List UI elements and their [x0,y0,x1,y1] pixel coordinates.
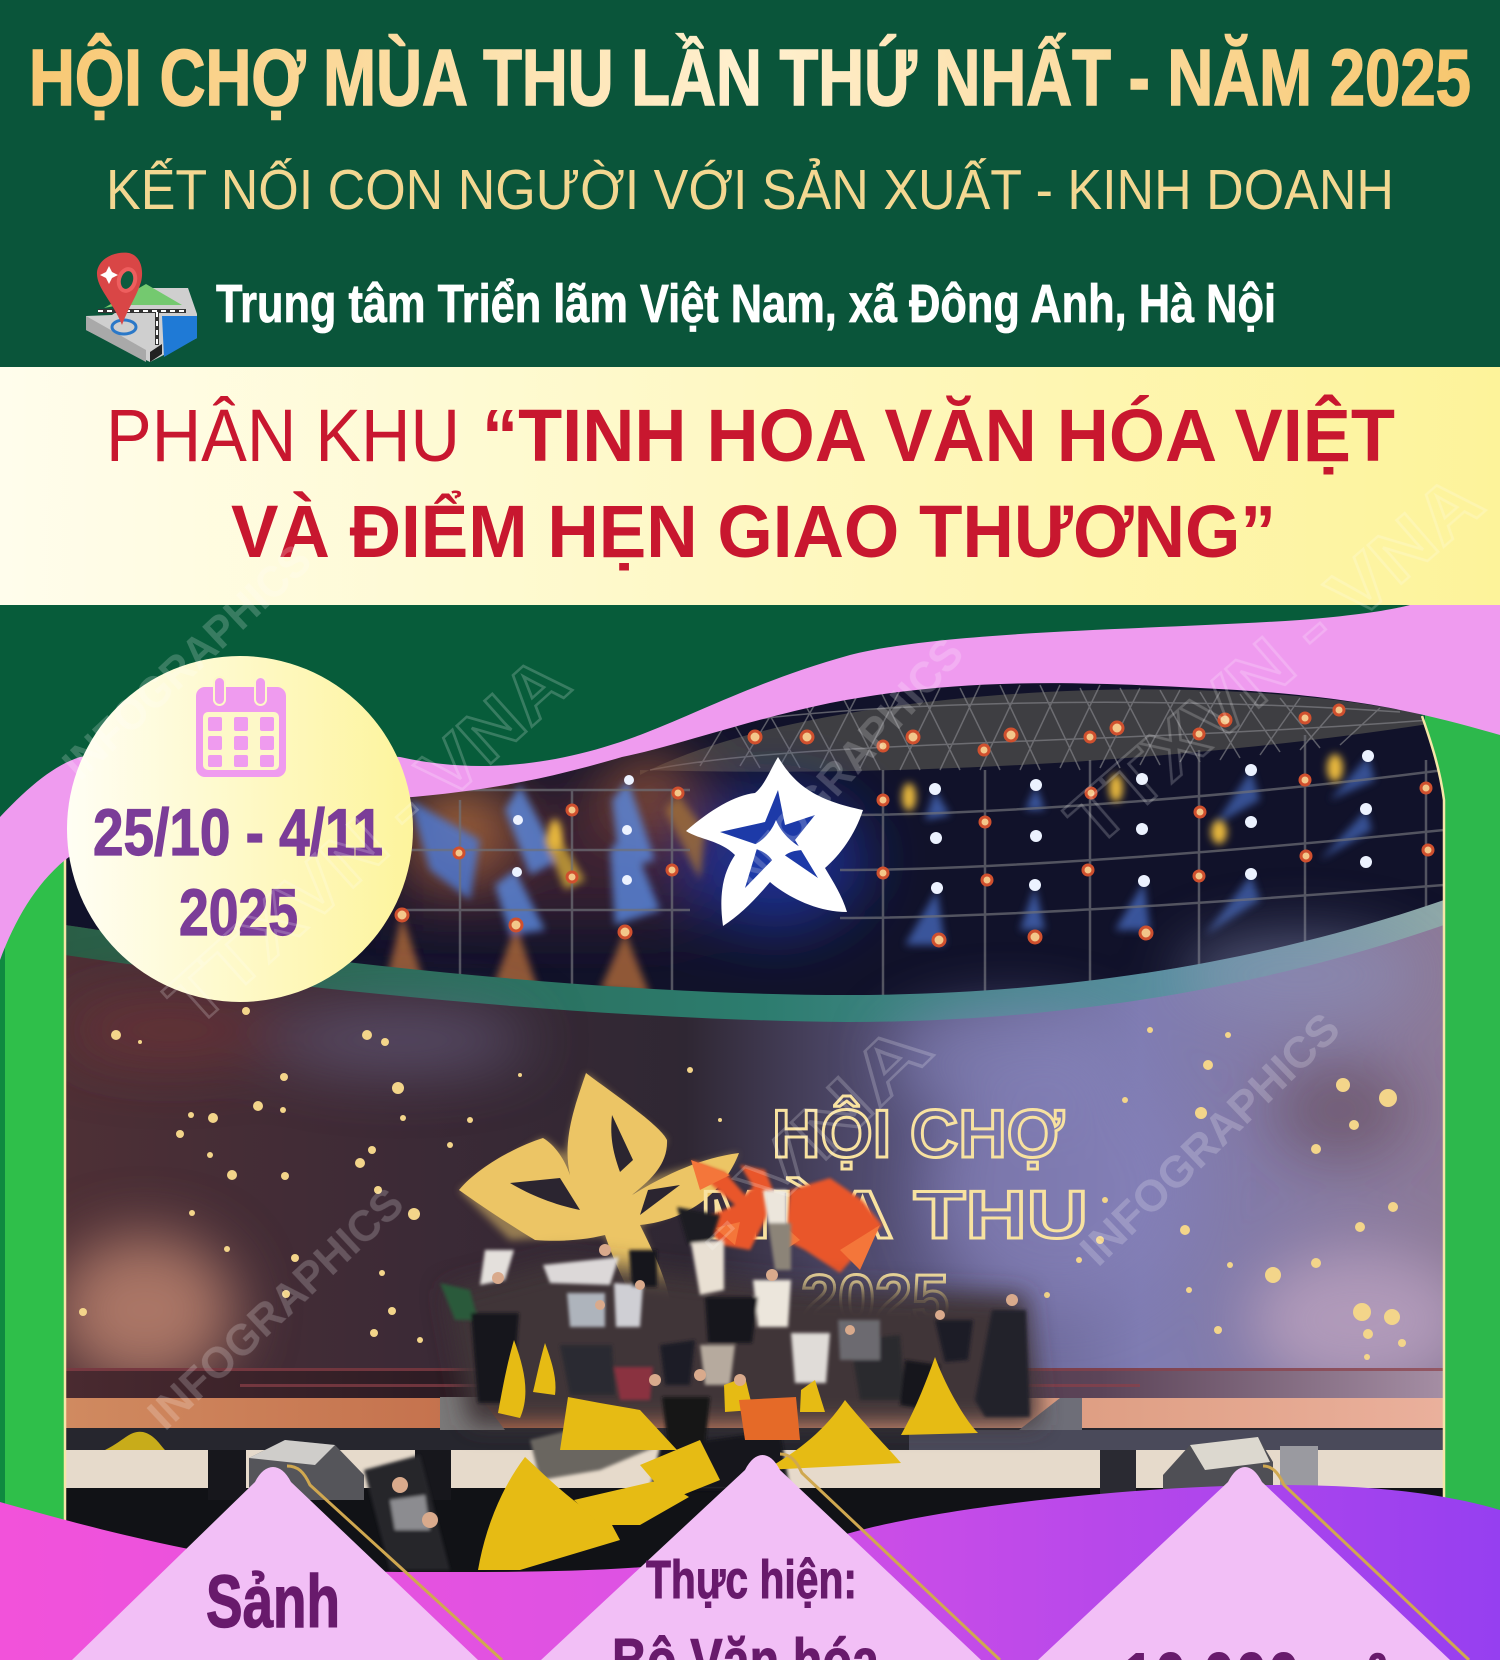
orange tree [691,1160,882,1273]
icon: map pin [86,253,197,362]
gold outline [780,1454,1000,1660]
pink wave [0,605,1500,960]
stage lights [396,705,1433,946]
watermarks: TTXVN - VNA [150,639,585,1042]
header panel [0,0,1500,367]
light beams [385,756,1375,995]
gold outline [287,1466,502,1660]
watermarks: INFOGRAPHICS [53,535,321,789]
photo frame edges [65,716,1444,1530]
truss roof [640,685,1440,775]
heading: zone label: PHÂN KHU [106,394,460,477]
gold outline [1263,1466,1469,1660]
info triangle: venue [72,1466,502,1660]
bottom wave [0,1485,1500,1660]
stage photo [66,683,1443,1572]
smoke haze [55,935,1470,1390]
orange costume [739,1397,800,1440]
date text: 25/10 - 4/11 [93,795,383,869]
logo: gold flower [459,1073,739,1320]
heading: zone name line 1: “TINH HOA VĂN HÓA VIỆT [482,394,1395,477]
neon sign text: 2025 [801,1261,949,1337]
heading: zone name line 2: VÀ ĐIỂM HẸN GIAO THƯƠNG” [231,490,1276,573]
venue text: Sảnh [206,1560,340,1643]
neon sign text: MÙA THU [700,1177,1088,1253]
watermarks: TTXVN - VNA [1051,458,1498,862]
date circle [67,656,413,1002]
watermarks: - VNA [673,1005,947,1274]
stars [79,1007,1406,1360]
info triangle: organiser [541,1454,1000,1660]
logo: white flower [686,757,863,926]
LED screen [66,925,1443,1368]
coloured back glow [390,755,865,930]
stage floor [66,1368,1443,1572]
info triangle: area [1038,1466,1469,1660]
organiser label: Thực hiện: [646,1550,857,1610]
watermarks [53,458,1498,1439]
yellow fabric [478,1340,978,1570]
neon sign text [704,1094,1085,1310]
banner: zone name [0,367,1500,605]
year text: 2025 [179,875,298,949]
watermarks: INFOGRAPHICS [138,1178,413,1439]
watermarks: INFOGRAPHICS [716,629,973,907]
neon sign text: HỘI CHỢ [772,1095,1064,1172]
subtitle: KẾT NỐI CON NGƯỜI VỚI SẢN XUẤT - KINH DOANH [106,157,1394,222]
faces [392,1244,1018,1528]
truss grid lines [400,735,1444,1010]
watermarks: INFOGRAPHICS [1071,1004,1350,1275]
green arc band [65,900,1444,1022]
location text: Trung tâm Triển lãm Việt Nam, xã Đông Anh, Hà Nội [216,274,1276,334]
speakers [208,1397,1318,1500]
green side panels [0,695,1500,1535]
dancers [364,1190,1040,1570]
icon: calendar [196,677,286,777]
